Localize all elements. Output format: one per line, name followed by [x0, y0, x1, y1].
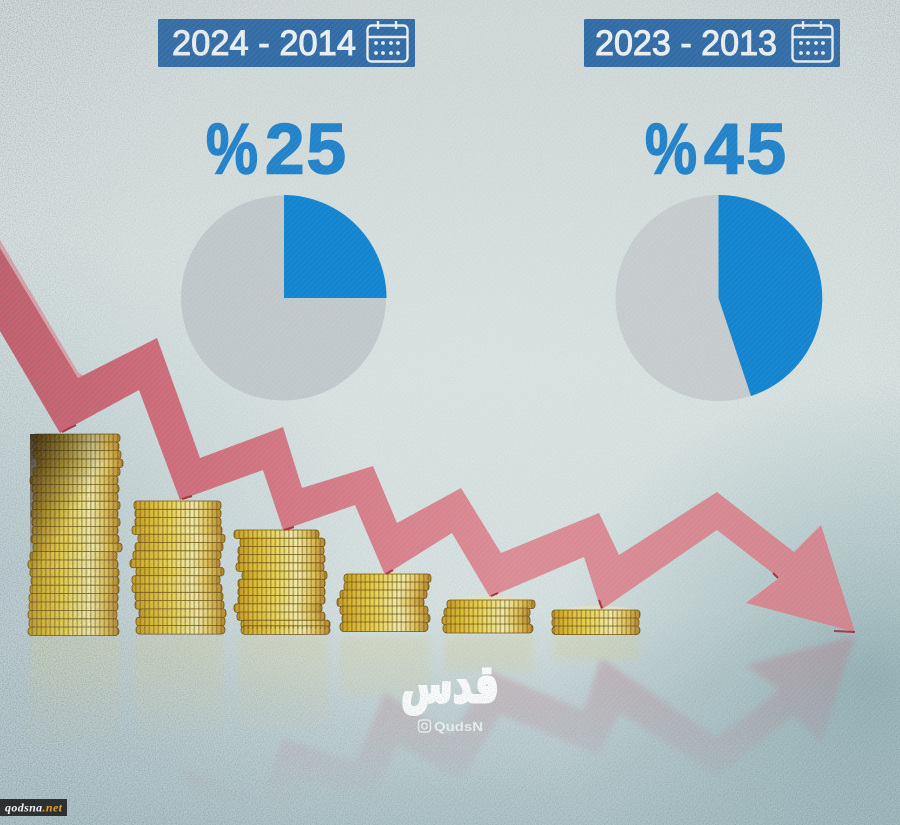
logo: Quds [401, 655, 499, 734]
percentage: 45: % [645, 110, 697, 190]
icon: calendar [368, 21, 408, 62]
coin stack 3 [234, 529, 330, 634]
percentage: 25: 25 [265, 110, 346, 190]
percentage: 25 [206, 110, 346, 190]
coin stack 5 [442, 596, 535, 633]
logo: Quds: قدس [401, 655, 499, 715]
badge text: 2023 - 2013 [595, 24, 777, 63]
percentage: 45 [645, 110, 786, 190]
percentage: 45: 45 [704, 110, 786, 190]
pie chart: 25 percent [181, 195, 386, 400]
icon: instagram [418, 720, 430, 732]
date badge: 2023 - 2013 [584, 19, 840, 67]
handle: QudsN [434, 720, 483, 734]
reflection of arrow [278, 636, 854, 766]
coin stack 1 [28, 433, 123, 636]
coin stack 4 [337, 572, 432, 632]
reflection of coin stacks [30, 635, 640, 710]
percentage: 25: % [206, 110, 258, 190]
coin stack 2 [130, 500, 226, 634]
pie chart: 45 percent [616, 195, 822, 401]
falling red arrow [0, 240, 855, 632]
badge text: 2024 - 2014 [172, 24, 356, 63]
icon: calendar [792, 21, 832, 62]
coin stack 6 [552, 606, 640, 635]
date badge: 2024 - 2014 [158, 19, 415, 67]
watermark: qodsna.net: qodsna.net [5, 800, 63, 814]
